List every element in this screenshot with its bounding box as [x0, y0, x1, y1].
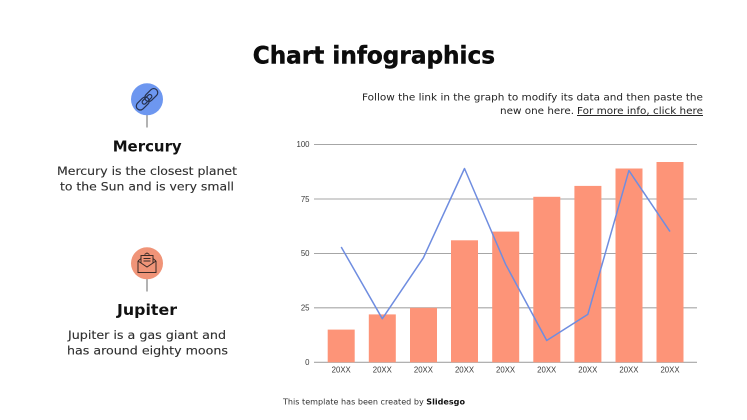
text: Mercury description: Mercury is the closest planet: [57, 165, 238, 178]
y axis grid lines: [314, 144, 697, 362]
combo chart: bars and line: [296, 140, 697, 375]
x axis labels: 20XX: [578, 366, 598, 375]
text: chart instructions with link: new one here.: [500, 106, 574, 117]
text: Jupiter description: has around eighty moons: [67, 344, 228, 357]
y axis labels: 100: [296, 140, 310, 149]
text: chart instructions with link: Follow the link in the graph to modify its data and then paste the: [362, 93, 703, 104]
text: Jupiter description: [67, 329, 228, 357]
heading: Jupiter: Jupiter: [116, 301, 177, 319]
panel: Mercury: [57, 83, 238, 194]
x axis labels: 20XX: [414, 366, 434, 375]
y axis labels: 50: [301, 249, 310, 258]
y axis labels: 75: [301, 195, 310, 204]
x axis labels: 20XX: [332, 366, 352, 375]
y axis labels: 25: [301, 304, 310, 313]
x axis labels: 20XX: [373, 366, 393, 375]
panel: Jupiter: [67, 247, 228, 357]
y axis labels: [296, 140, 310, 367]
x axis labels: 20XX: [537, 366, 557, 375]
x axis labels: 20XX: [619, 366, 639, 375]
footer credit: This template has been created by Slidesgo: [282, 398, 465, 407]
bars: [328, 162, 684, 362]
icon: open envelope on orange circle: [131, 247, 163, 292]
x axis labels: [332, 366, 680, 375]
title: Chart infographics: [253, 42, 495, 70]
icon: chain link on blue circle: [131, 83, 163, 128]
y axis labels: 0: [305, 358, 310, 367]
x axis labels: 20XX: [496, 366, 516, 375]
x axis labels: 20XX: [660, 366, 680, 375]
text: chart instructions with link: For more info, click here: [577, 106, 703, 117]
x axis labels: 20XX: [455, 366, 475, 375]
text: chart instructions with link: [362, 93, 703, 117]
heading: Mercury: Mercury: [113, 138, 182, 156]
text: Jupiter description: Jupiter is a gas giant and: [67, 329, 226, 342]
text: Mercury description: to the Sun and is very small: [60, 181, 234, 194]
line series: [341, 168, 670, 340]
text: Mercury description: [57, 165, 238, 194]
